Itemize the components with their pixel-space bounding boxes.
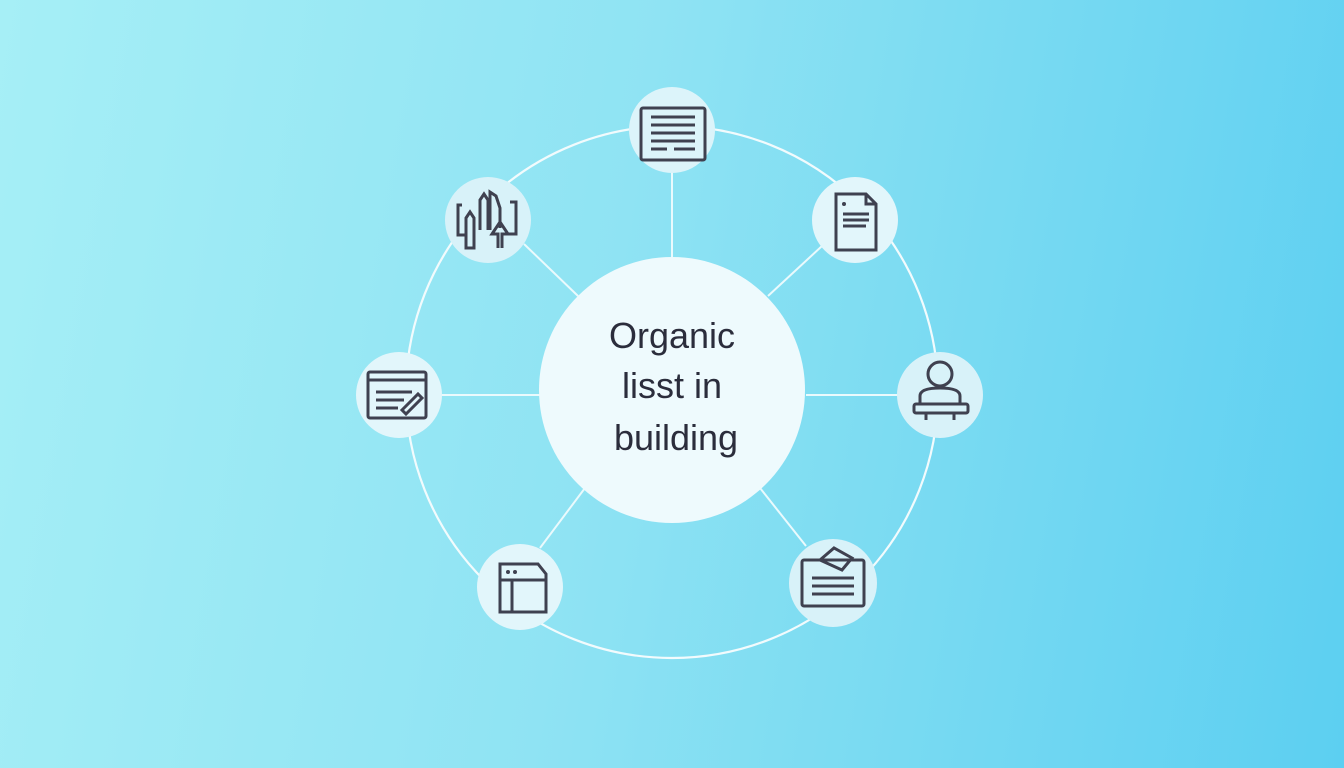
node: lower-right envelope doc: [789, 539, 877, 627]
node: lower-left window: [477, 544, 563, 630]
node: top document lines: [629, 87, 715, 173]
center circle: [539, 257, 805, 523]
ring connecting nodes: [406, 126, 938, 658]
center circle: Organic: [609, 315, 735, 356]
node: upper-left arrows: [445, 177, 531, 263]
center circle: building: [614, 417, 738, 458]
center circle: lisst in: [622, 365, 722, 406]
spokes: [442, 172, 898, 548]
node: upper-right file: [812, 177, 898, 263]
node: left form: [356, 352, 442, 438]
node: right person: [897, 352, 983, 438]
